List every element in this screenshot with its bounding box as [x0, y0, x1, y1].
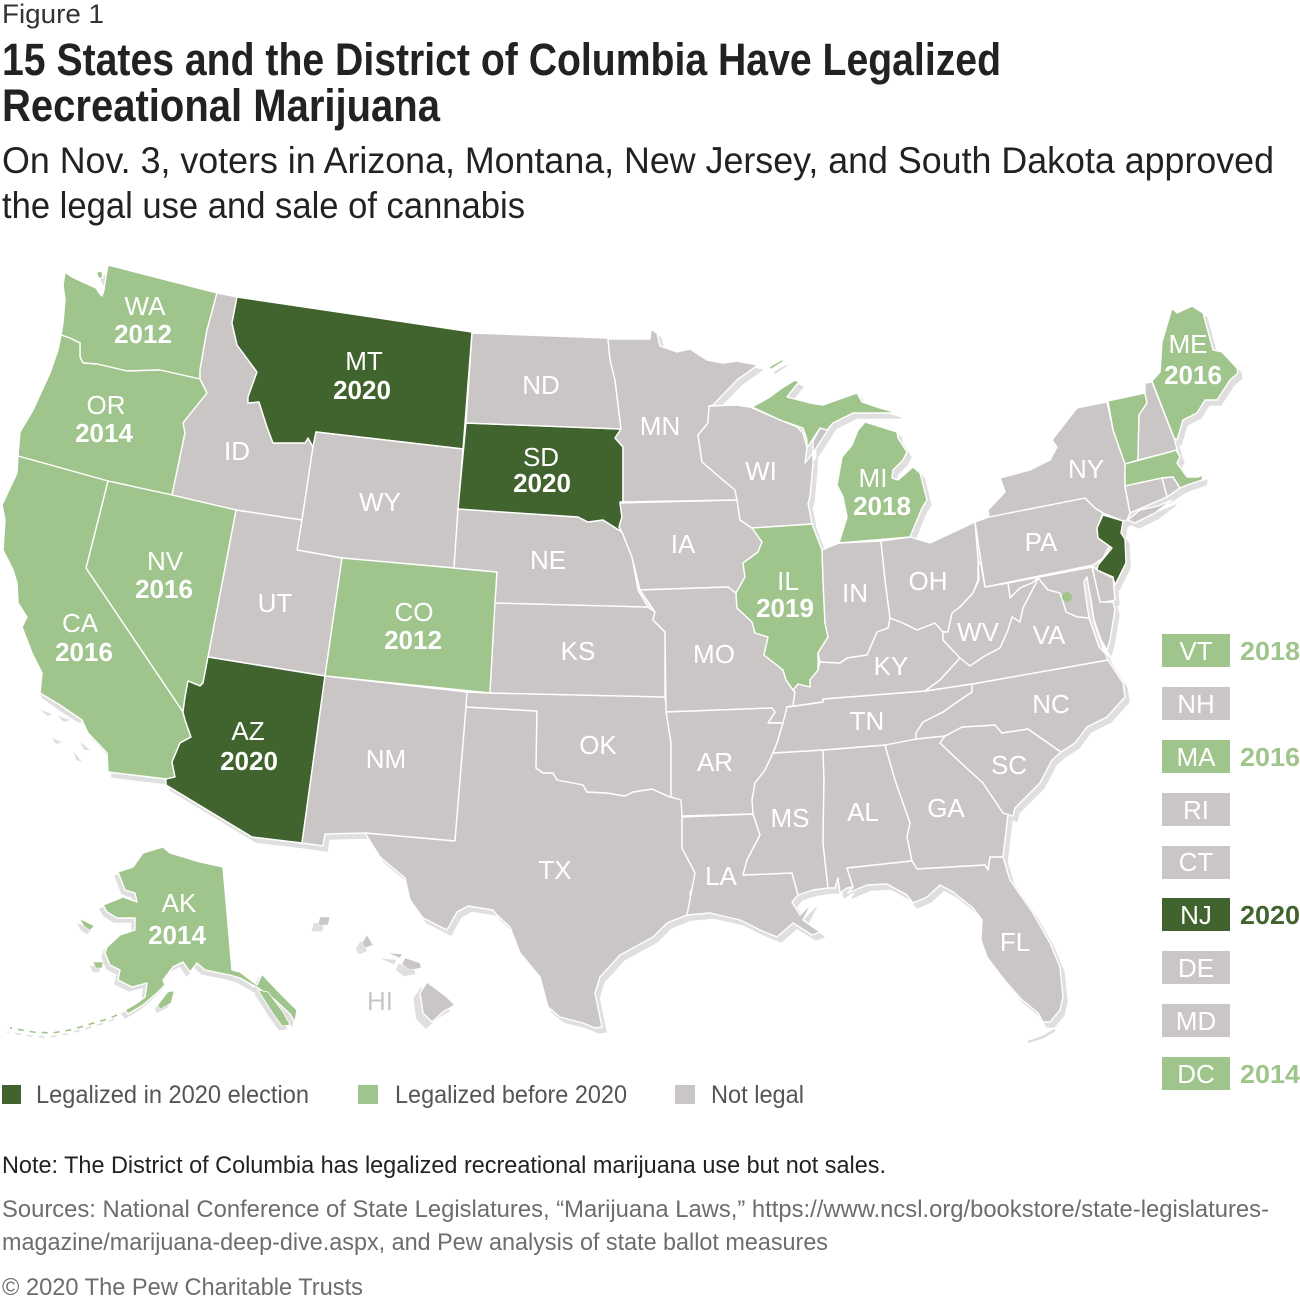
state: SD: 2020	[513, 468, 571, 498]
state: NM: NM	[366, 744, 406, 774]
state: KS	[490, 603, 665, 697]
state: ME	[1152, 306, 1238, 440]
state: AR: AR	[697, 747, 733, 777]
state: ME: 2016	[1164, 360, 1222, 390]
state: TN	[773, 684, 972, 753]
state: NY: NY	[1068, 454, 1104, 484]
state: AZ: 2020	[220, 746, 278, 776]
state: MD	[1008, 567, 1115, 650]
state: OR	[18, 335, 207, 495]
state: MN	[608, 329, 758, 502]
state: OR: OR	[86, 390, 126, 420]
state: PA	[975, 498, 1110, 587]
state: UT	[208, 510, 342, 676]
state: IN: IN	[842, 578, 868, 608]
small-state key: DE	[1162, 951, 1230, 984]
state: AK: 2014	[148, 920, 206, 950]
state: LA: LA	[705, 861, 738, 891]
legend	[2, 1081, 804, 1109]
sources: magazine/marijuana-deep-dive.aspx, and Pew analysis of state ballot measures	[2, 1229, 828, 1256]
state: HI big island	[420, 982, 455, 1022]
state: NV: 2016	[135, 574, 193, 604]
state: KY	[787, 618, 960, 707]
state: WI: WI	[745, 456, 777, 486]
state: IA	[619, 500, 762, 593]
state: AL	[823, 745, 912, 893]
state: NY	[988, 402, 1130, 521]
state: NY Long Island	[1128, 500, 1172, 523]
state: WI	[698, 405, 828, 528]
small-state key: NJ: 2020	[1240, 900, 1300, 930]
San Juan islands	[96, 271, 103, 279]
state: MI lower peninsula	[837, 422, 927, 543]
state: HI other islands	[318, 917, 421, 970]
state: NC	[916, 660, 1125, 752]
state: CO: CO	[394, 597, 434, 627]
map: Alaska	[10, 847, 297, 1033]
state: AK: AK	[162, 888, 197, 918]
state: ND	[466, 333, 621, 429]
state: WA	[61, 265, 217, 379]
Isle Royale	[770, 360, 783, 369]
state: WA: WA	[125, 291, 166, 321]
small-state key: MD	[1162, 1004, 1230, 1037]
small-state key: VT	[1162, 634, 1300, 667]
state: AR	[666, 708, 783, 816]
label: HI: HI	[367, 986, 393, 1016]
state: OH: OH	[908, 566, 948, 596]
state: UT: UT	[258, 588, 292, 618]
state: TN: TN	[850, 706, 884, 736]
small-state key: CT	[1162, 846, 1230, 879]
small-state key: MA	[1162, 740, 1300, 773]
state: IN	[818, 541, 890, 663]
state: IL	[736, 524, 828, 690]
small-state key: RI: RI	[1183, 795, 1209, 825]
channel islands	[40, 710, 90, 762]
small-state key: MA: MA	[1176, 742, 1216, 772]
state: SD: SD	[523, 442, 559, 472]
small-state key: NH	[1162, 687, 1230, 720]
Aleutian chain	[10, 1015, 117, 1033]
state: MI upper peninsula	[752, 380, 897, 448]
state: NC: NC	[1032, 689, 1070, 719]
small-state key: VT: 2018	[1240, 636, 1300, 666]
state: AK	[103, 847, 297, 1022]
state: GA: GA	[927, 793, 965, 823]
map: Hawaii	[318, 917, 455, 1022]
state: MS	[743, 750, 828, 895]
state: OK	[466, 692, 671, 797]
state: NV: NV	[147, 546, 184, 576]
state: SC: SC	[991, 750, 1027, 780]
state: AZ	[166, 657, 325, 843]
state: ME: ME	[1168, 329, 1208, 359]
small-state key: DE: DE	[1178, 953, 1214, 983]
state: AL: AL	[847, 797, 879, 827]
state: CA	[2, 456, 191, 779]
state: CT	[1125, 478, 1167, 513]
state: GA	[885, 736, 1013, 870]
state: MI lower peninsula: 2018	[853, 491, 911, 521]
state: ID	[172, 293, 313, 520]
small-state key: NH: NH	[1177, 689, 1215, 719]
title	[2, 34, 1001, 131]
state: IL: IL	[777, 566, 799, 596]
state: KS: KS	[561, 636, 595, 666]
state: VA	[925, 578, 1108, 691]
legend item: not legal	[675, 1081, 804, 1109]
southern California shore shading	[40, 693, 82, 723]
Alaska islands	[80, 919, 290, 1026]
state: MI lower peninsula: MI	[859, 463, 887, 493]
state: MT: MT	[345, 346, 383, 376]
state: MS: MS	[770, 803, 810, 833]
state: MT: 2020	[333, 375, 391, 405]
state: AZ: AZ	[231, 716, 265, 746]
state: NH	[1138, 382, 1178, 460]
small-state key: NJ: NJ	[1180, 900, 1212, 930]
state: MA	[1125, 450, 1203, 488]
state: LA	[682, 814, 820, 937]
small-state key: DC: DC	[1177, 1059, 1215, 1089]
state: OR: 2014	[75, 418, 133, 448]
state: CA: CA	[62, 608, 99, 638]
state: NE	[454, 509, 648, 607]
state: ID: ID	[224, 436, 250, 466]
title: 15 States and the District of Columbia Have Legalized	[2, 34, 1001, 85]
state: MO	[640, 587, 795, 723]
subtitle: the legal use and sale of cannabis	[2, 185, 525, 226]
legend item: not legal: Not legal	[711, 1081, 804, 1109]
sources: Sources: National Conference of State Legislatures, “Marijuana Laws,” https://www.ncsl.org/bookstore/state-legislatures-	[2, 1196, 1269, 1223]
state: MO: MO	[693, 639, 735, 669]
state: CA: 2016	[55, 637, 113, 667]
state: SD	[458, 423, 623, 532]
state: MT	[232, 297, 472, 449]
state: NE: NE	[530, 545, 566, 575]
state: NJ	[1097, 515, 1126, 585]
state: TX	[365, 707, 697, 1028]
small-state key: DC	[1162, 1057, 1300, 1090]
small-state key: RI	[1162, 793, 1230, 826]
marker: DC	[1062, 592, 1072, 602]
map: contiguous United States	[2, 265, 1238, 1028]
state: CO	[325, 558, 497, 693]
state: WY	[297, 432, 463, 568]
note: Note: The District of Columbia has legalized recreational marijuana use but not sales.	[2, 1152, 886, 1179]
state: MN: MN	[640, 411, 680, 441]
state: TX: TX	[538, 855, 572, 885]
legend item: 2020 election: Legalized in 2020 election	[36, 1081, 309, 1109]
state: FL: FL	[1000, 927, 1030, 957]
small-state key: DC: 2014	[1240, 1059, 1300, 1089]
title: Recreational Marijuana	[2, 80, 441, 131]
state: RI	[1162, 477, 1180, 497]
state: SC	[940, 725, 1061, 816]
state: WV	[943, 562, 1038, 666]
legend item: before 2020: Legalized before 2020	[395, 1081, 627, 1109]
state: CO: 2012	[384, 625, 442, 655]
state: FL	[847, 857, 1063, 1022]
state: WY: WY	[359, 487, 401, 517]
state: OH	[881, 522, 978, 632]
state: ND: ND	[522, 370, 560, 400]
state: KY: KY	[874, 651, 908, 681]
Florida Keys	[1028, 1030, 1055, 1042]
state: DE	[1092, 566, 1115, 603]
small-state key: NJ	[1162, 898, 1300, 931]
sources	[2, 1196, 1269, 1256]
small-state key: CT: CT	[1179, 847, 1213, 877]
state: WV: WV	[957, 617, 1000, 647]
state: NM	[302, 676, 467, 846]
state: IA: IA	[671, 529, 696, 559]
state: IL: 2019	[756, 593, 814, 623]
state: VT	[1108, 393, 1147, 464]
state: WA: 2012	[114, 319, 172, 349]
state: OK: OK	[579, 730, 617, 760]
subtitle	[2, 140, 1274, 226]
small-state key: VT: VT	[1179, 636, 1213, 666]
small-state key: MA: 2016	[1240, 742, 1300, 772]
state: PA: PA	[1025, 527, 1058, 557]
state: VA: VA	[1033, 620, 1066, 650]
state: NV	[86, 481, 236, 712]
subtitle: On Nov. 3, voters in Arizona, Montana, New Jersey, and South Dakota approved	[2, 140, 1274, 181]
small-state key: MD: MD	[1176, 1006, 1216, 1036]
